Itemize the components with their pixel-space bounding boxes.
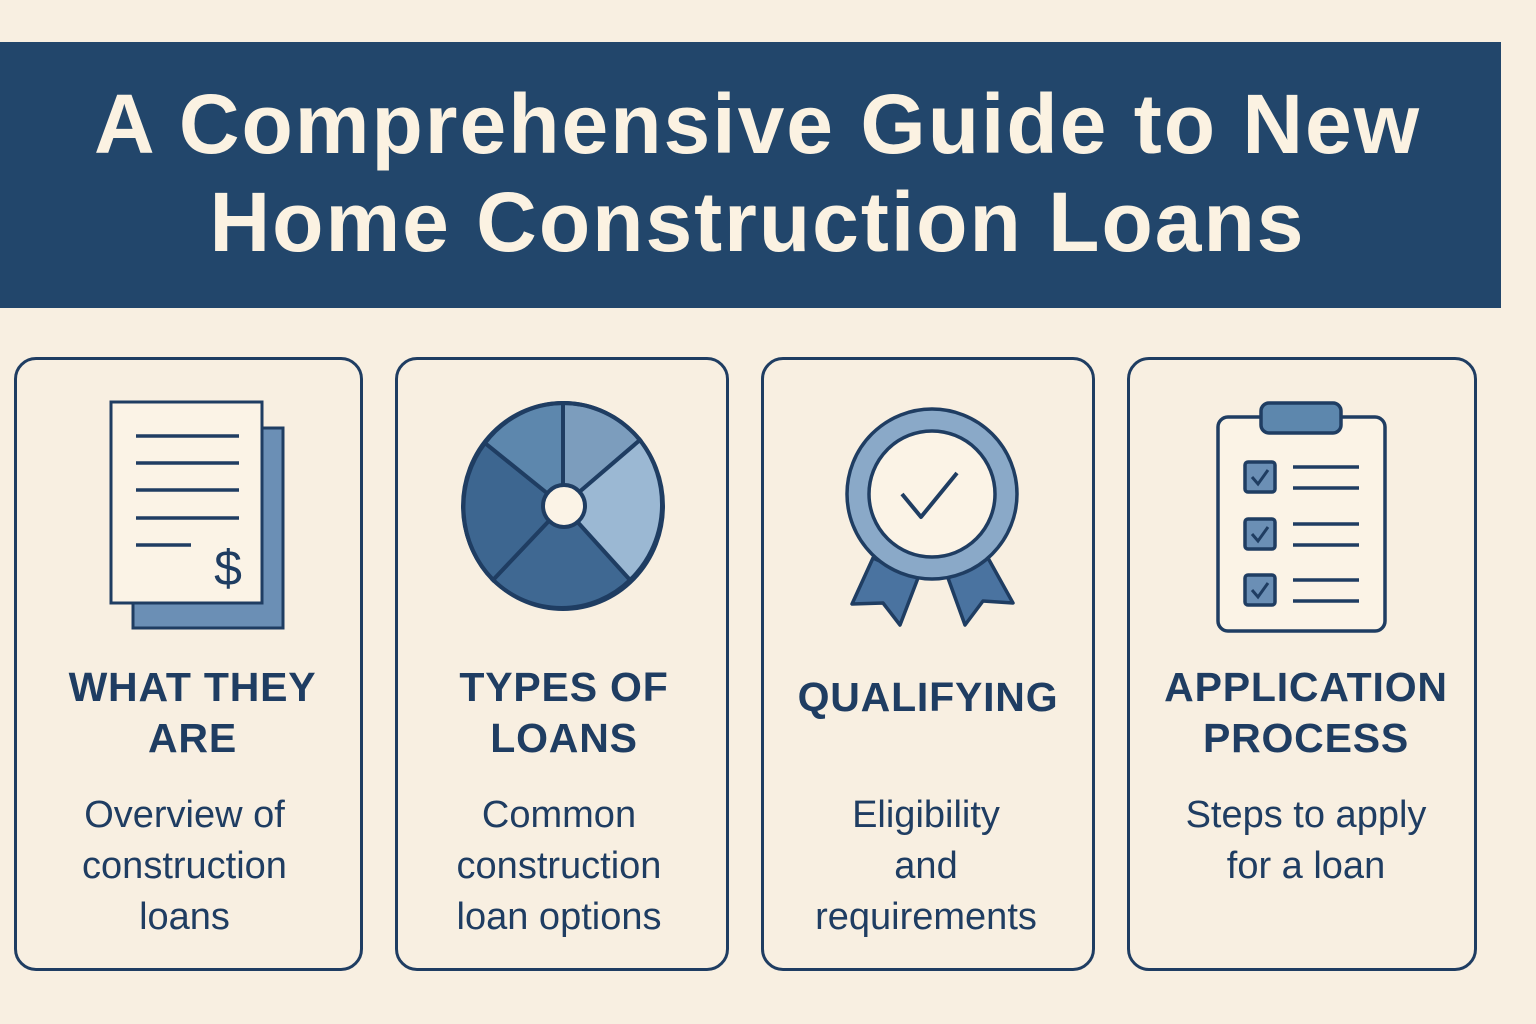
heading: TYPES OF xyxy=(459,664,669,710)
icon: clipboard checklist xyxy=(1216,401,1387,633)
heading: ARE xyxy=(148,715,237,761)
description: loans xyxy=(139,896,230,938)
panel: qualifying xyxy=(761,357,1095,971)
heading: QUALIFYING xyxy=(798,674,1058,720)
description: loan options xyxy=(457,896,661,938)
heading xyxy=(1164,664,1448,761)
description xyxy=(82,794,287,938)
description: construction xyxy=(82,845,287,887)
icon: award ribbon xyxy=(845,407,1019,627)
title xyxy=(94,77,1421,269)
title: A Comprehensive Guide to New xyxy=(94,77,1421,171)
panel: types of loans xyxy=(395,357,729,971)
heading: PROCESS xyxy=(1203,715,1409,761)
description: Overview of xyxy=(84,794,285,836)
icon: pie chart xyxy=(461,401,665,611)
description: Steps to apply xyxy=(1186,794,1426,836)
description xyxy=(815,794,1037,938)
icon: document with dollar: $ xyxy=(214,540,242,596)
description xyxy=(1186,794,1426,887)
description xyxy=(457,794,661,938)
description: requirements xyxy=(815,896,1037,938)
panel: application process xyxy=(1127,357,1477,971)
description: for a loan xyxy=(1227,845,1385,887)
description: Common xyxy=(482,794,636,836)
icon: document with dollar xyxy=(110,400,284,630)
panel: what they are xyxy=(14,357,363,971)
description: and xyxy=(894,845,958,887)
heading xyxy=(68,664,316,761)
heading: WHAT THEY xyxy=(69,664,316,710)
heading: APPLICATION xyxy=(1164,664,1448,710)
title banner xyxy=(0,42,1501,308)
title: Home Construction Loans xyxy=(209,175,1306,269)
description: Eligibility xyxy=(852,794,1000,836)
heading xyxy=(459,664,669,761)
description: construction xyxy=(457,845,661,887)
heading: LOANS xyxy=(490,715,638,761)
